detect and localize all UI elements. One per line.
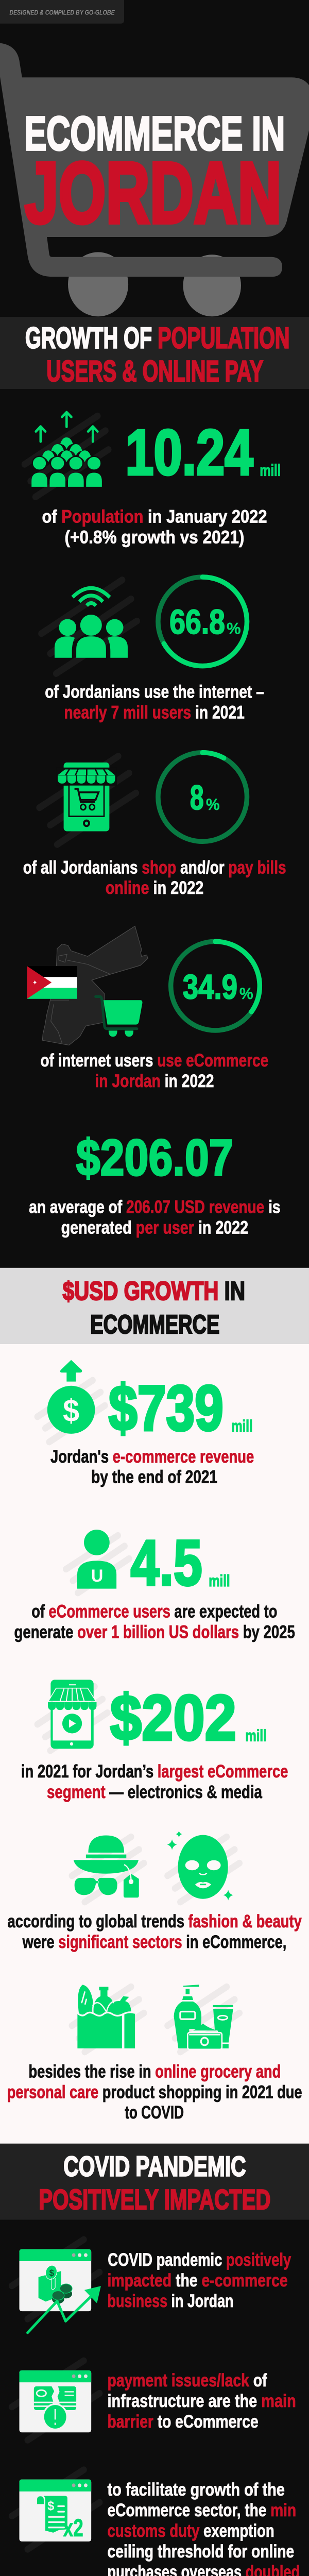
section header: USD growth: [0, 1268, 309, 1344]
icon: wifi and people: [55, 588, 128, 658]
stat: $206.07: $206.07: [76, 1129, 233, 1186]
text: grocery and personal care: besides the rise in online grocery and: [28, 2062, 281, 2082]
credit tab: DESIGNED & COMPILED BY GO-GLOBE: [9, 9, 115, 16]
text: revenue: Jordan's e-commerce revenue: [50, 1447, 254, 1467]
hero: shopping cart with title: [0, 43, 309, 316]
icon: Jordan flag: [27, 966, 77, 999]
icon: beauty face mask: [167, 1831, 233, 1901]
section header: growth of population: [0, 317, 309, 389]
text: population: of Population in January 2022: [42, 507, 267, 527]
text: largest segment: in 2021 for Jordan’s largest eCommerce: [21, 1761, 288, 1782]
ring chart: 8%: %: [206, 796, 220, 814]
text: customs duty: [108, 2480, 300, 2576]
text: revenue: by the end of 2021: [91, 1467, 217, 1487]
text: use eCommerce: in Jordan in 2022: [95, 1071, 214, 1091]
card: doubled customs receipt: x2: [63, 2514, 83, 2541]
text: internet users: of Jordanians use the internet –: [45, 682, 264, 702]
ring chart: 34.9%: [171, 941, 260, 1030]
icon: personal care products: [174, 1985, 233, 2049]
text: largest segment: [21, 1761, 288, 1802]
card: payment issues: [19, 2370, 91, 2432]
icon: user: [77, 1530, 116, 1589]
text: revenue per user: generated per user in 2022: [61, 1217, 248, 1238]
section header: COVID pandemic: [0, 2144, 309, 2220]
text: fashion and beauty: [8, 1911, 302, 1952]
icon: money bag with arrow: [47, 1360, 95, 1434]
ring chart: 8%: 8: [190, 778, 204, 817]
text: COVID impact: [108, 2250, 291, 2311]
text: shop and pay bills: of all Jordanians shop and/or pay bills: [23, 858, 286, 878]
stat: $202 mill: $202: [110, 1683, 236, 1754]
text: shop and pay bills: online in 2022: [106, 878, 203, 898]
card: doubled customs receipt: $: [47, 2499, 55, 2513]
text: fashion and beauty: were significant sectors in eCommerce,: [22, 1932, 286, 1952]
panel: light USD growth section: [0, 1344, 309, 2144]
stat: 4.5 mill: mill: [209, 1572, 230, 1590]
stat: $202 mill: mill: [245, 1727, 267, 1745]
text: payment barrier: barrier to eCommerce: [108, 2412, 259, 2432]
text: COVID impact: business in Jordan: [108, 2291, 233, 2311]
stat: 4.5 mill: 4.5: [131, 1528, 202, 1599]
text: payment barrier: [108, 2370, 296, 2432]
text: payment barrier: infrastructure are the main: [108, 2391, 296, 2411]
section header: COVID pandemic: COVID PANDEMIC: [63, 2151, 246, 2182]
ring chart: 66.8%: %: [227, 620, 241, 638]
icon: shop phone with cart: [56, 762, 117, 831]
text: customs duty: to facilitate growth of the: [108, 2480, 285, 2500]
text: revenue: [50, 1447, 254, 1487]
icon: Jordan map: [42, 926, 148, 1045]
icon: shopping cart: [96, 996, 142, 1037]
icon: tablet shop with play: [48, 1680, 96, 1749]
text: eCommerce users: generate over 1 billion US dollars by 2025: [14, 1622, 295, 1642]
text: use eCommerce: of internet users use eCommerce: [40, 1050, 268, 1071]
ring chart: 66.8%: [158, 577, 247, 666]
text: customs duty: customs duty exemption: [108, 2521, 274, 2541]
text: customs duty: eCommerce sector, the min: [108, 2500, 296, 2520]
card: doubled customs receipt: [19, 2480, 91, 2541]
stat: population 10.24 mill: 10.24: [125, 417, 253, 488]
text: grocery and personal care: to COVID: [125, 2103, 184, 2123]
icon: fashion hat and sunglasses: [74, 1835, 139, 1897]
text: grocery and personal care: [7, 2062, 302, 2123]
icon: user: U: [91, 1566, 103, 1586]
ring chart: 8%: [158, 753, 247, 841]
text: internet users: nearly 7 mill users in 2021: [64, 702, 245, 723]
ring chart: 34.9%: 34.9: [183, 968, 237, 1006]
text: eCommerce users: [14, 1602, 295, 1642]
text: payment barrier: payment issues/lack of: [108, 2370, 267, 2391]
text: eCommerce users: of eCommerce users are expected to: [31, 1602, 277, 1622]
text: population: [42, 507, 267, 548]
stat: population 10.24 mill: mill: [260, 462, 281, 480]
icon: crowd with arrows: [31, 412, 102, 487]
stat: $739 mill: mill: [231, 1418, 253, 1435]
section header: USD growth: ECOMMERCE: [90, 1310, 219, 1340]
text: revenue per user: [29, 1197, 281, 1238]
card: growth chart with bag: [19, 2249, 101, 2333]
icon: grocery bag: [77, 1985, 135, 2048]
text: COVID impact: impacted the e-commerce: [108, 2270, 288, 2291]
icon: money bag with arrow: $: [63, 1393, 79, 1429]
text: revenue per user: an average of 206.07 USD revenue is: [29, 1197, 281, 1217]
credit tab: [0, 0, 124, 24]
section header: USD growth: $USD GROWTH IN: [63, 1276, 245, 1306]
ring chart: 34.9%: %: [239, 985, 253, 1003]
text: use eCommerce: [40, 1050, 268, 1091]
text: shop and pay bills: [23, 858, 286, 898]
text: largest segment: segment — electronics & media: [47, 1782, 263, 1802]
stat: $739 mill: $739: [109, 1372, 224, 1444]
ring chart: 66.8%: 66.8: [169, 603, 225, 641]
text: internet users: [45, 682, 264, 723]
card: growth chart with bag: $: [49, 2267, 54, 2278]
text: COVID impact: COVID pandemic positively: [108, 2250, 291, 2270]
text: population: (+0.8% growth vs 2021): [65, 528, 244, 548]
